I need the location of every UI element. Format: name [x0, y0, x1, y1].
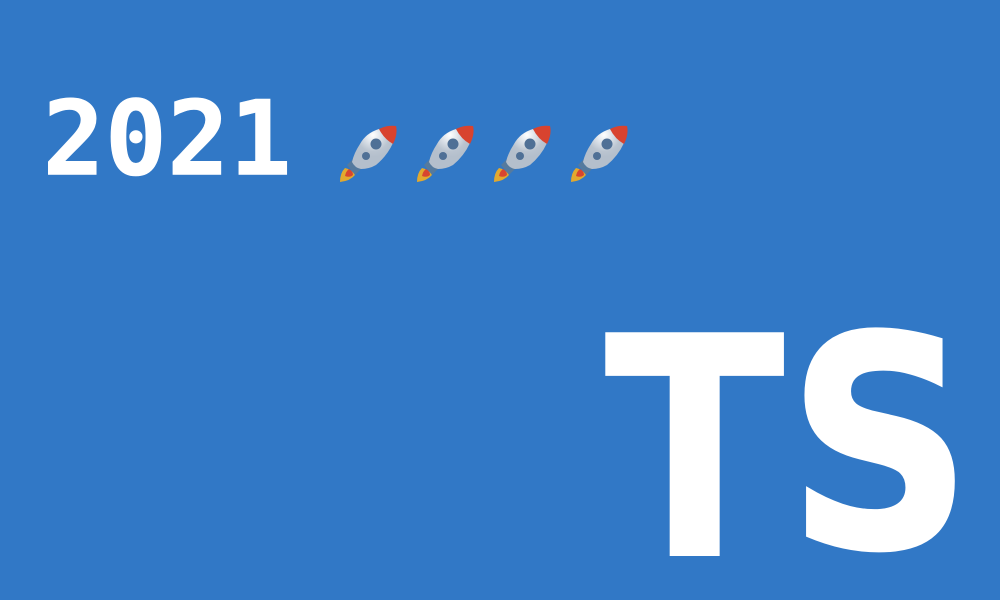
heading: year: 2021	[42, 80, 292, 200]
icon: rocket 4	[571, 126, 628, 182]
icon: rocket 1	[340, 126, 397, 182]
logo text: TS	[604, 271, 972, 600]
icon: rocket 3	[494, 126, 551, 182]
icon: rocket 2	[417, 126, 474, 182]
